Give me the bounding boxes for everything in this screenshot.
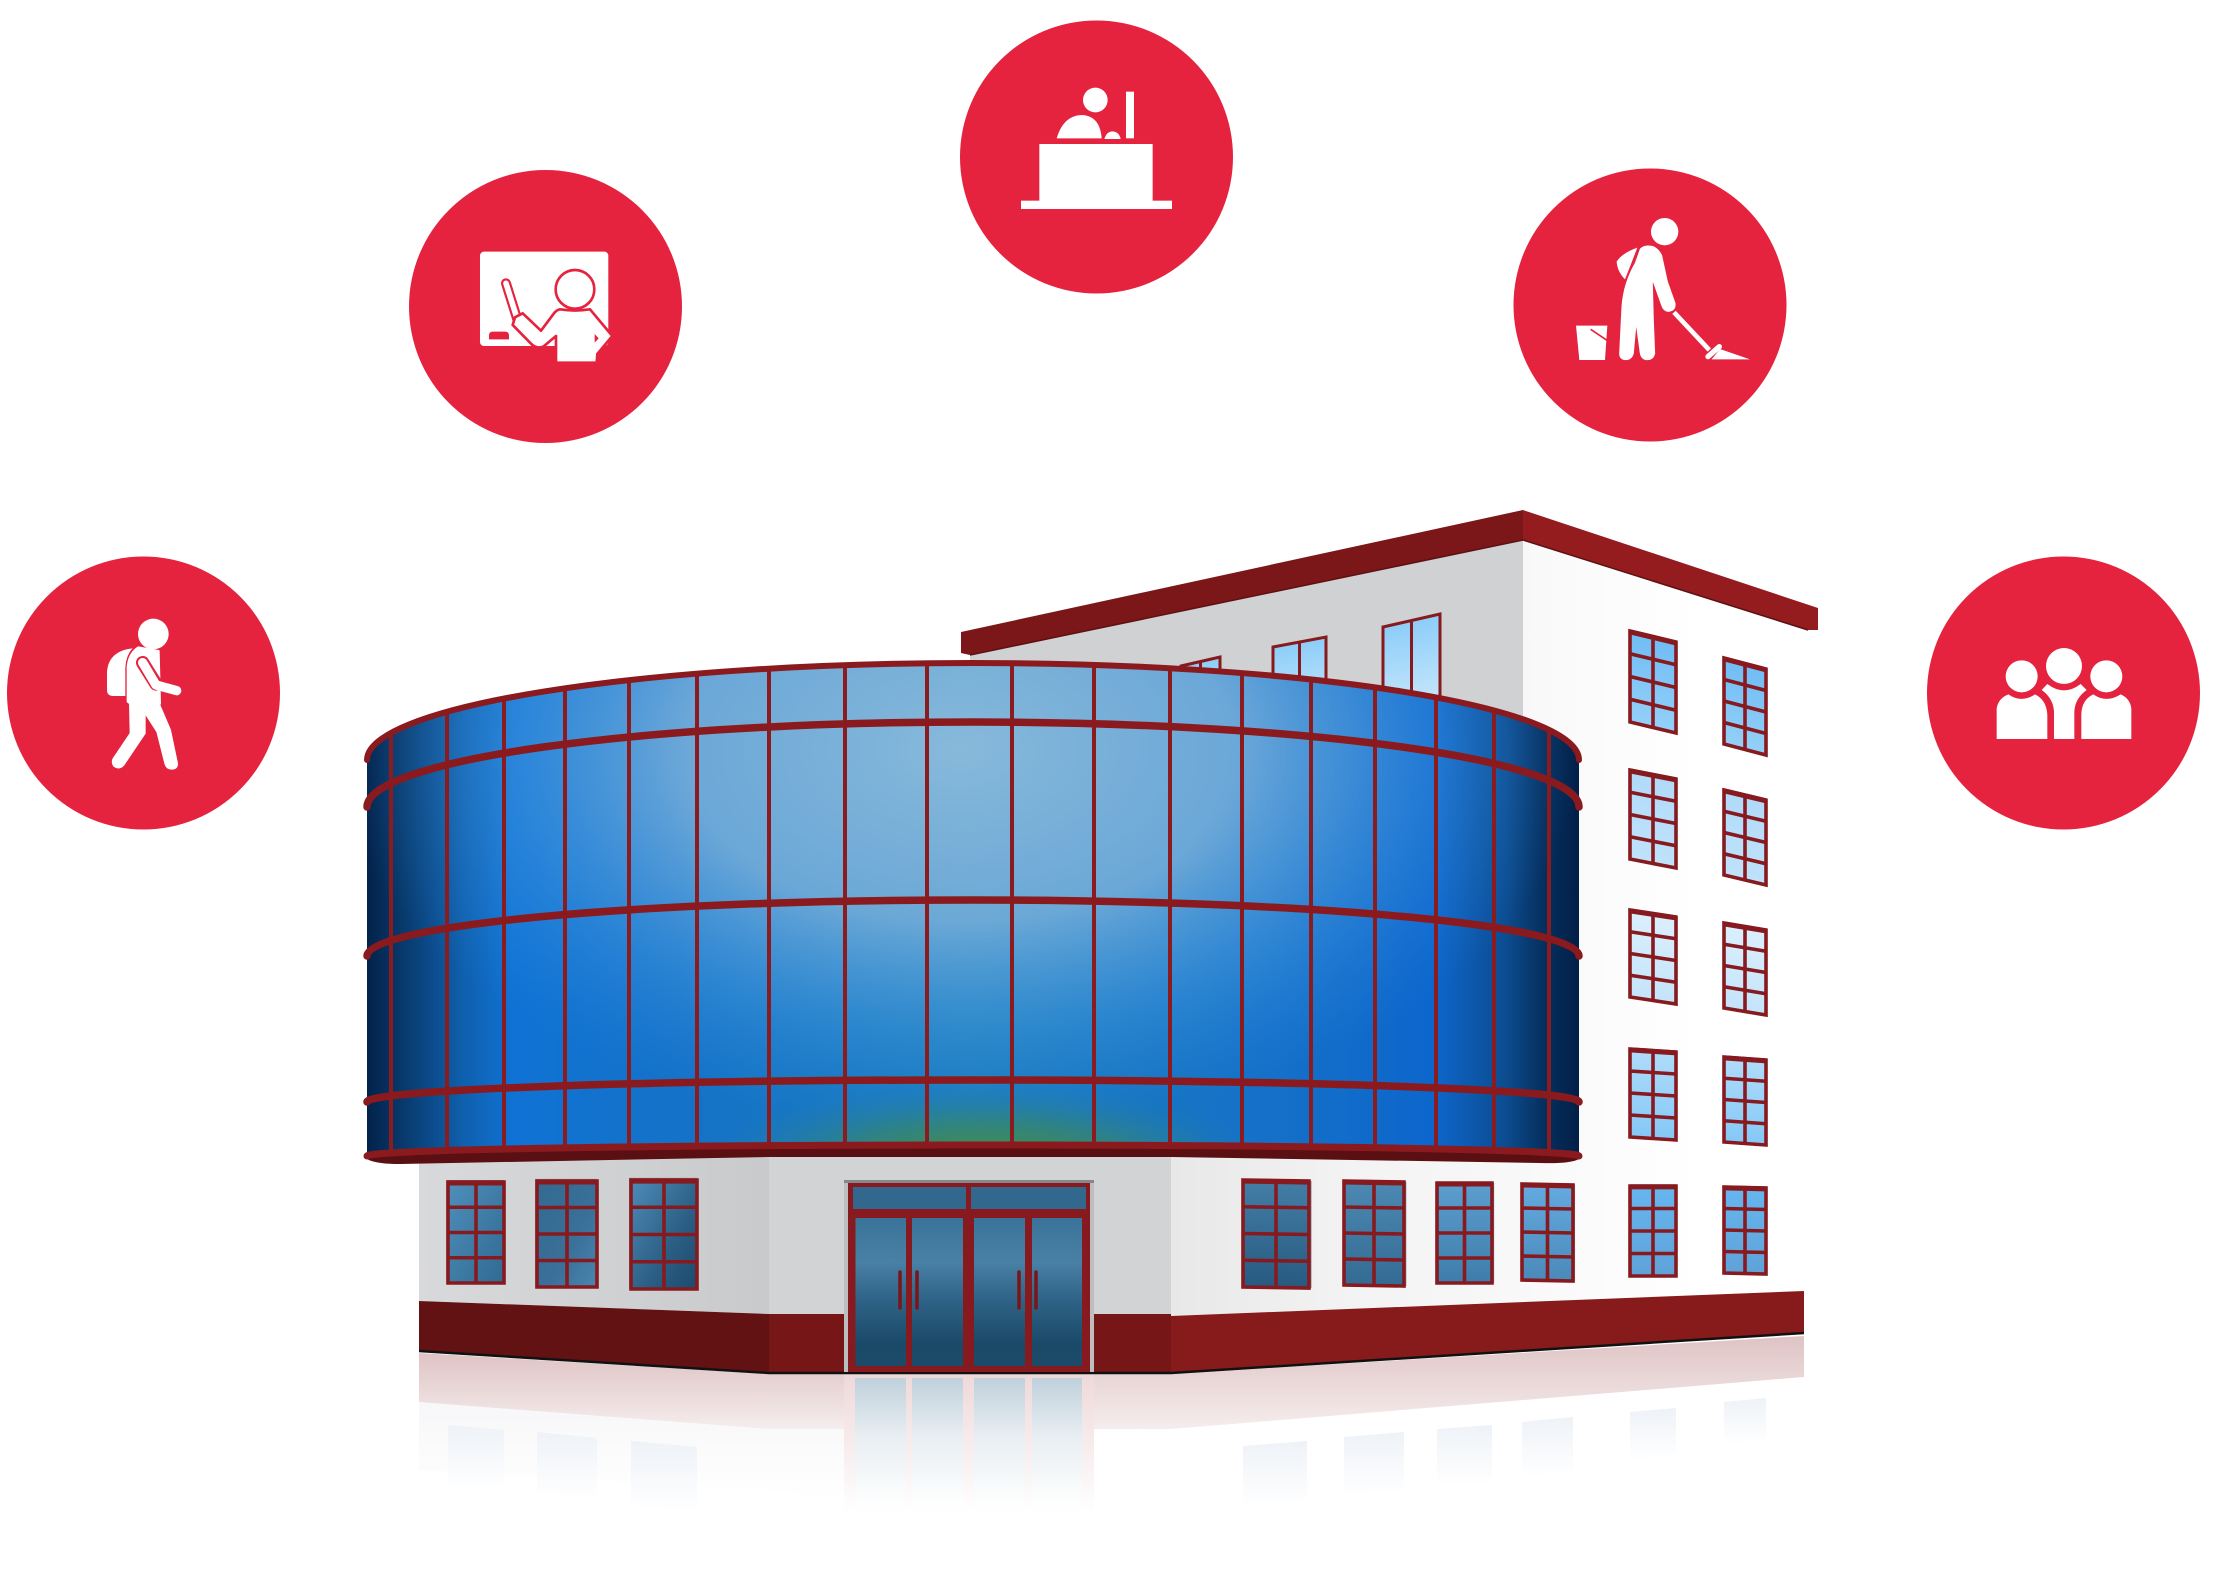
icon: teacher at a board — [480, 252, 612, 363]
mullions — [391, 650, 1549, 1170]
icon: cleaner mopping with bucket — [1576, 218, 1750, 360]
icon: three people — [1997, 648, 2131, 739]
plinth stripe middle — [769, 1314, 1171, 1372]
building — [363, 510, 1818, 1374]
entrance doors — [844, 1180, 1094, 1372]
ground floor windows right — [1243, 1180, 1575, 1288]
icon circle: group of people — [1927, 556, 2200, 830]
ground floor middle wall — [769, 1140, 1171, 1316]
right wall windows — [1630, 631, 1767, 1276]
right wall — [1171, 540, 1810, 1316]
reflection of the building on the floor — [419, 1336, 1804, 1513]
ground floor windows left — [446, 1178, 697, 1289]
glass drum — [363, 660, 1583, 1160]
ground floor left wall — [419, 1140, 769, 1314]
icon: walking student with backpack — [107, 619, 177, 769]
door panes — [856, 1218, 1082, 1366]
transom panes — [853, 1187, 1086, 1209]
plinth stripe right — [1171, 1291, 1804, 1372]
icon circle: cleaner — [1514, 168, 1786, 442]
drum underside — [367, 1145, 1579, 1164]
icon circle: student walking — [7, 556, 280, 830]
door handles — [900, 1272, 1036, 1308]
icon circle: receptionist — [960, 20, 1233, 294]
icon: person behind a desk — [1021, 88, 1172, 209]
drum bands — [367, 663, 1579, 1156]
roof — [961, 510, 1818, 655]
upper windows on rear wall — [1181, 614, 1440, 747]
plinth shadow line — [419, 1333, 1804, 1373]
plinth stripe left — [419, 1301, 769, 1372]
icon circle: teacher — [409, 170, 682, 443]
upper wall behind the glass drum — [970, 540, 1523, 800]
